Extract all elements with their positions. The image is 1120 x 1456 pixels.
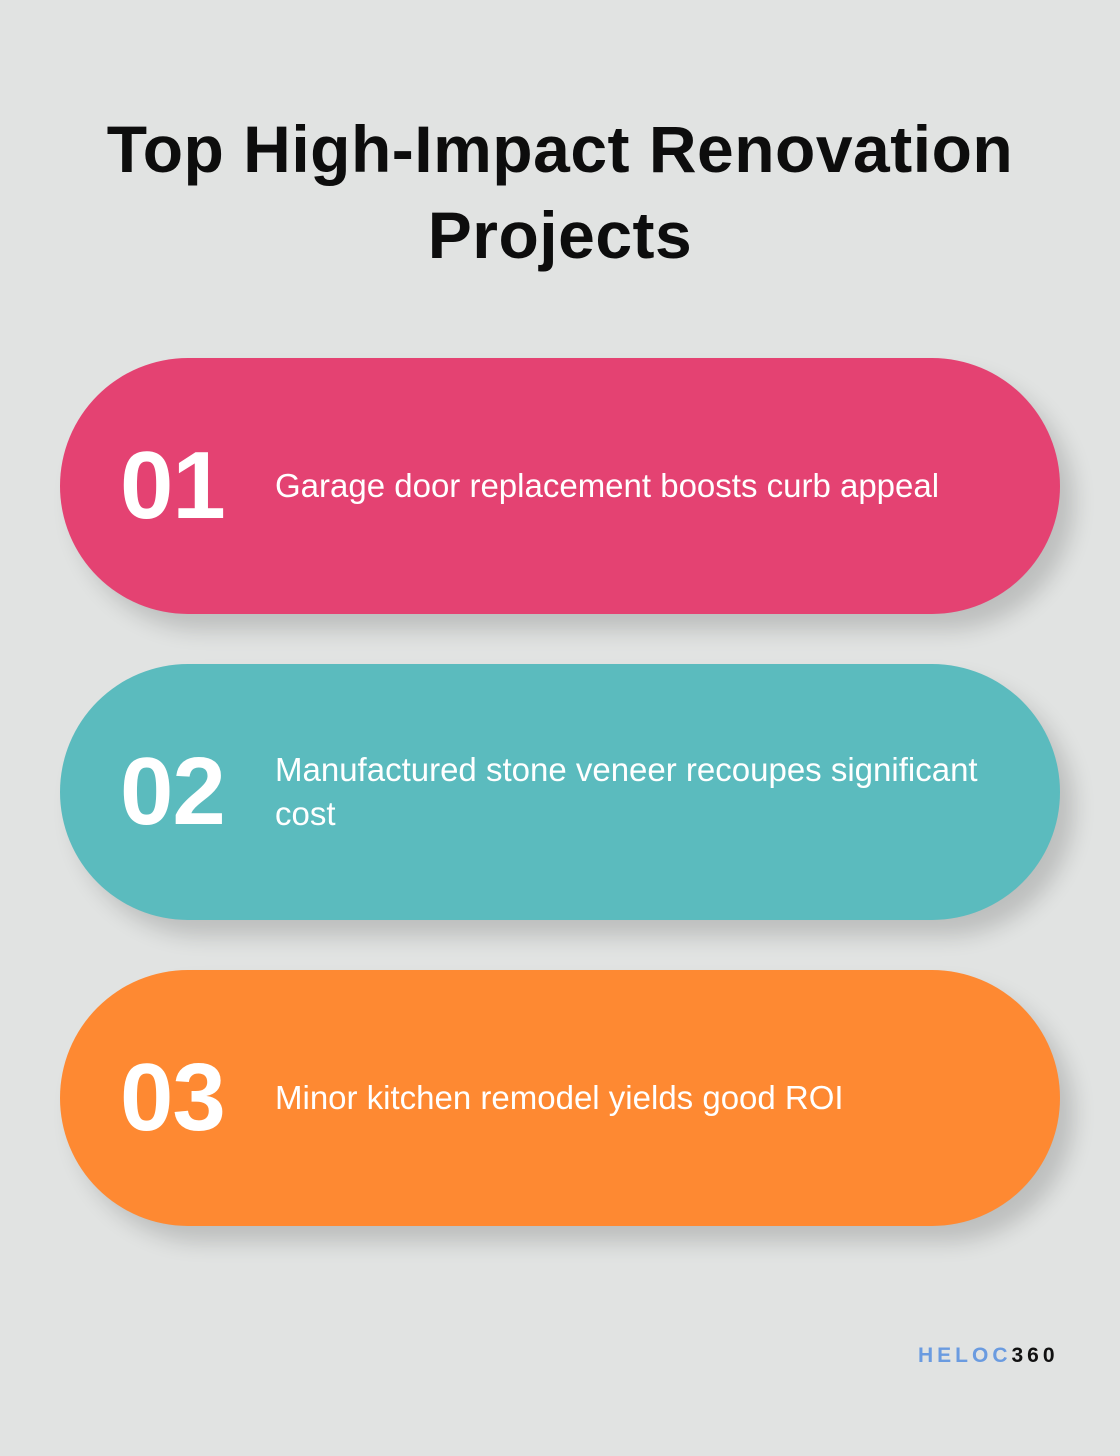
title: Projects — [428, 198, 692, 272]
text 01: Garage door replacement boosts curb appeal — [275, 467, 939, 504]
text 02: Manufactured stone veneer recoupes significant cost — [275, 751, 978, 832]
panel: item 02 — [60, 664, 1060, 920]
number 02: 02 — [120, 738, 225, 845]
title — [107, 112, 1013, 272]
number 01: 01 — [120, 432, 225, 539]
panel: item 03 — [60, 970, 1060, 1226]
panel: item 01 — [60, 358, 1060, 614]
number 03: 03 — [120, 1044, 225, 1151]
logo: HELOC360 — [918, 1344, 1059, 1367]
title: Top High-Impact Renovation — [107, 112, 1013, 186]
text 03: Minor kitchen remodel yields good ROI — [275, 1079, 844, 1116]
